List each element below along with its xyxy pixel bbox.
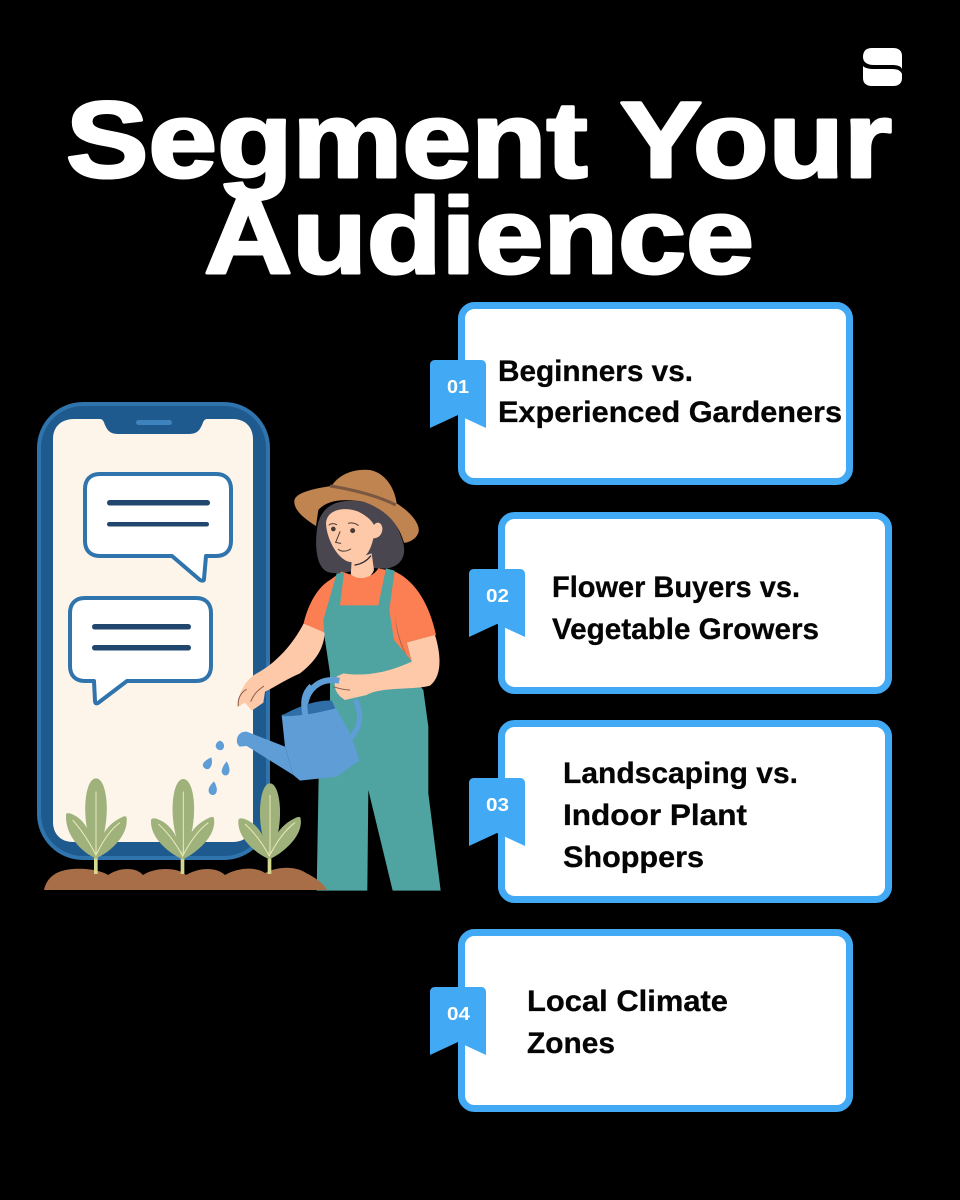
card 01: [430, 306, 850, 482]
face: [326, 509, 382, 562]
hat: [294, 470, 419, 543]
card text 01: [498, 355, 842, 429]
card text 02: Flower Buyers vs.: [552, 571, 800, 604]
facial features: [329, 523, 371, 565]
watering can: [237, 680, 360, 781]
plant 1: [66, 778, 127, 874]
card text 04: Local Climate: [527, 985, 728, 1018]
card text 04: Zones: [527, 1027, 615, 1060]
card text 03: [563, 757, 798, 874]
card text 02: Vegetable Growers: [552, 613, 819, 646]
badge 04: [430, 987, 486, 1055]
soil: [44, 868, 327, 890]
card text 03: Shoppers: [563, 841, 704, 874]
card text 03: Indoor Plant: [563, 799, 747, 832]
card 04: [430, 932, 850, 1108]
badge 03: 03: [486, 795, 509, 815]
plants: [66, 741, 301, 874]
badge 02: [469, 569, 525, 637]
badge 02: 02: [486, 586, 509, 606]
badge 04: 04: [447, 1004, 470, 1024]
card 02: [469, 516, 888, 690]
chat bubble 2: [70, 598, 211, 703]
title: Segment Your: [66, 79, 892, 200]
hair: [316, 501, 404, 573]
water drops: [203, 741, 230, 795]
overalls: [317, 568, 441, 891]
illustration: phone, plants and gardener: [37, 402, 441, 891]
card text 01: Experienced Gardeners: [498, 396, 842, 429]
title: Audience: [204, 175, 754, 296]
icon: brand logo: [863, 48, 902, 86]
finger lines: [238, 686, 350, 706]
card text 02: [552, 571, 819, 646]
badge 03: [469, 778, 525, 846]
phone: [37, 402, 270, 860]
badge 01: [430, 360, 486, 428]
neck: [351, 553, 374, 581]
right arm and hand: [335, 635, 440, 700]
badge 01: 01: [447, 377, 469, 397]
card text 03: Landscaping vs.: [563, 757, 798, 790]
card text 01: Beginners vs.: [498, 355, 693, 388]
chat bubble 1: [85, 474, 231, 581]
card text 04: [527, 985, 728, 1060]
shirt: [304, 568, 436, 662]
card 03: [469, 724, 888, 900]
plant 2: [151, 779, 214, 874]
gardener: [237, 470, 441, 891]
title: [66, 79, 892, 296]
left arm and hand: [237, 623, 325, 711]
shirt fold: [395, 615, 408, 658]
plant 3: [238, 783, 301, 874]
